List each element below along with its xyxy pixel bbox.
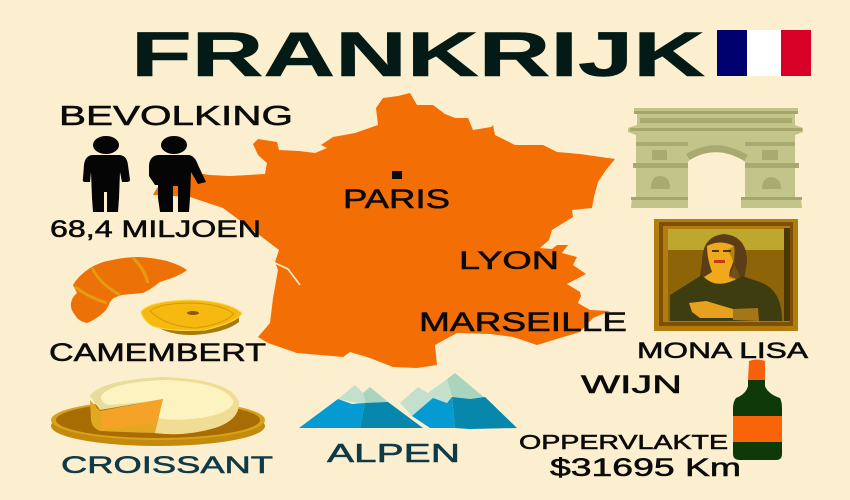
icon: French flag xyxy=(717,30,811,76)
icon: wine bottle xyxy=(733,360,782,460)
label: population value: 68,4 MILJOEN xyxy=(50,216,261,243)
heading: Bevolking: BEVOLKING xyxy=(59,100,293,131)
title: FRANKRIJK xyxy=(131,20,705,90)
icon: Arc de Triomphe xyxy=(628,108,803,208)
icon: two people xyxy=(83,136,206,212)
icon: croissant xyxy=(71,257,187,323)
label: Camembert: CAMEMBERT xyxy=(49,339,266,367)
label: Oppervlakte: OPPERVLAKTE xyxy=(519,432,728,454)
label: Wijn: WIJN xyxy=(581,371,682,399)
icon: yellow cheese plate xyxy=(141,300,242,335)
estuary xyxy=(275,263,300,285)
label: Marseille: MARSEILLE xyxy=(419,307,627,337)
map of France xyxy=(153,93,615,368)
label: Lyon: LYON xyxy=(459,247,559,275)
icon: Alps mountains xyxy=(299,373,517,429)
icon: cheese wheel on plate xyxy=(51,377,265,446)
icon: Paris marker xyxy=(392,171,402,179)
label: Paris: PARIS xyxy=(343,184,450,214)
icon: Mona Lisa painting xyxy=(654,219,798,331)
label: area value: $31695 Km xyxy=(550,454,741,482)
label: Croissant: CROISSANT xyxy=(61,452,274,479)
label: Mona Lisa: MONA LISA xyxy=(637,338,808,363)
label: Alpen: ALPEN xyxy=(327,438,460,468)
